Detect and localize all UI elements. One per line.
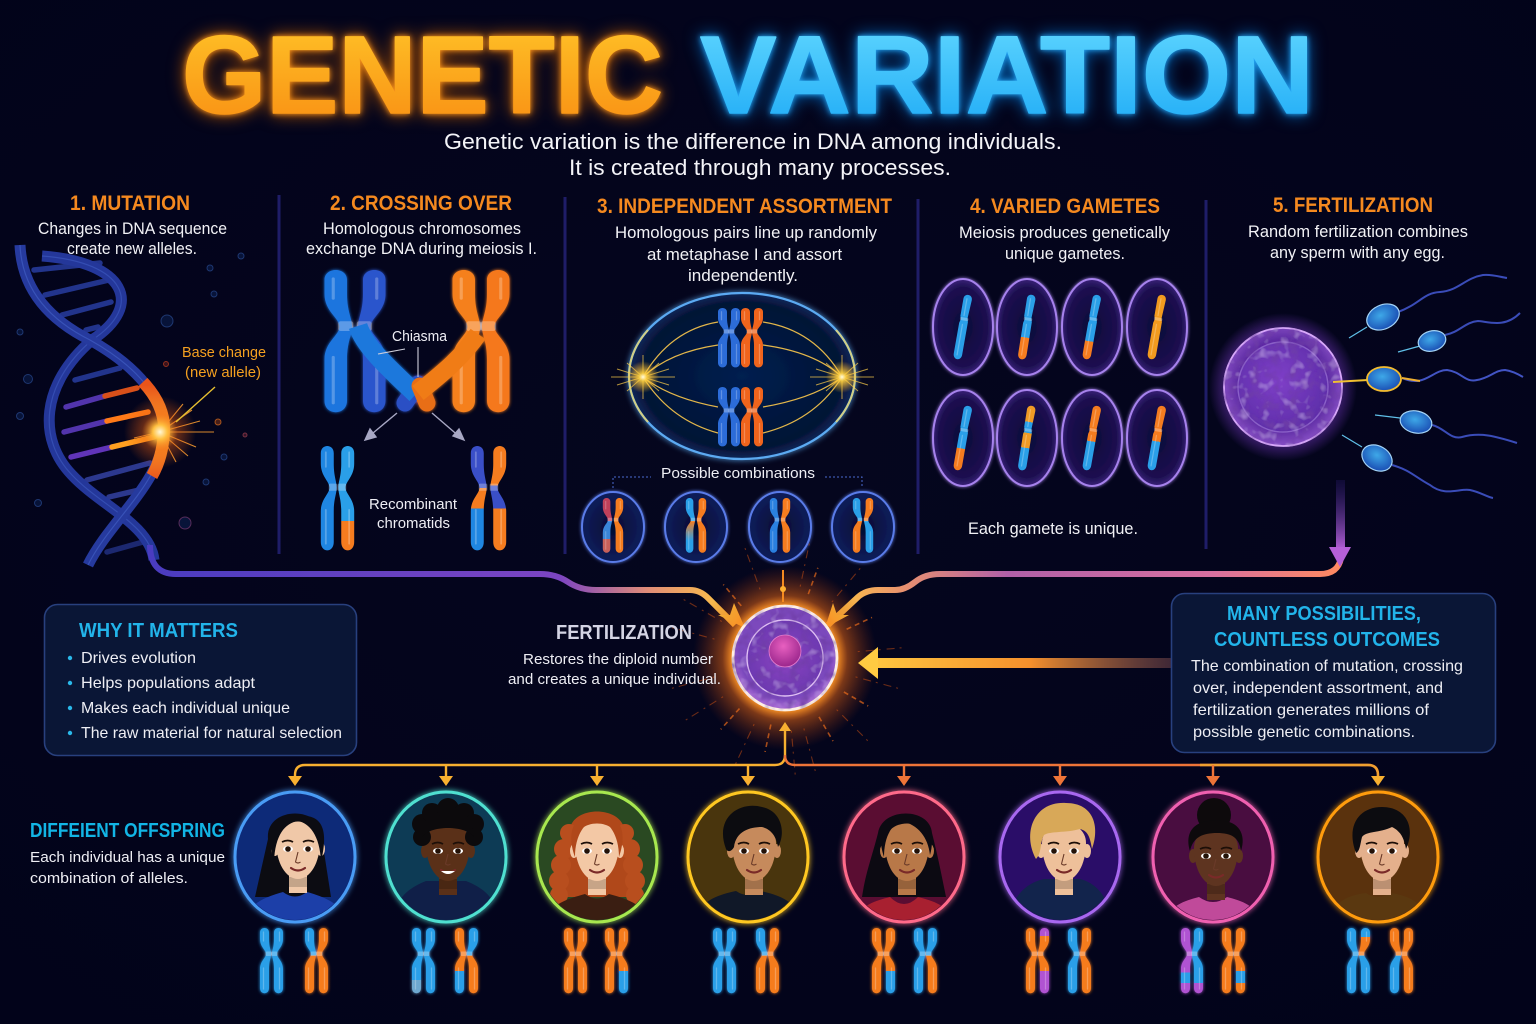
chromosomes: offspring 3 xyxy=(564,928,628,993)
description: fertilization: any sperm with any egg. xyxy=(1270,244,1445,262)
portrait: offspring 6 xyxy=(1000,792,1120,923)
title: VARIATION xyxy=(700,14,1314,137)
portrait: offspring 8 xyxy=(1318,792,1438,923)
recombinant chromosomes xyxy=(321,446,506,550)
title xyxy=(182,14,1314,137)
heading: why it matters: WHY IT MATTERS xyxy=(79,620,238,642)
chromosomes: offspring 2 xyxy=(412,928,478,993)
bullet list xyxy=(68,650,342,742)
panel: why it matters xyxy=(44,604,356,756)
arrow: pathway from fertilization step to zygote xyxy=(825,480,1351,628)
chromosomes: offspring 1 xyxy=(260,928,328,993)
icon: mutation burst xyxy=(124,387,215,468)
description: fertilization: Random fertilization combines xyxy=(1248,223,1468,241)
portrait: offspring 5 xyxy=(844,792,964,923)
heading: fertilization: 5. FERTILIZATION xyxy=(1273,194,1433,217)
panel: mutation xyxy=(16,192,266,565)
panel dividers xyxy=(279,195,1206,554)
label: base change: (new allele) xyxy=(185,365,261,381)
description: mutation: Changes in DNA sequence xyxy=(38,220,227,238)
description: mutation: create new alleles. xyxy=(67,240,197,258)
portrait: offspring 1 xyxy=(235,792,355,923)
portrait: offspring 7 xyxy=(1153,792,1273,923)
description: independent assortment: Homologous pairs line up randomly xyxy=(615,224,878,242)
DNA helix xyxy=(20,245,164,565)
icon: fertilized zygote xyxy=(671,543,903,776)
description: independent assortment: at metaphase I and assort xyxy=(647,246,842,264)
label: chiasma: Chiasma xyxy=(392,329,448,345)
heading: many possibilities: MANY POSSIBILITIES, xyxy=(1227,603,1421,625)
chromosomes: offspring 5 xyxy=(872,928,937,993)
title: GENETIC xyxy=(182,14,663,137)
gamete cells xyxy=(933,279,1187,486)
label: fertilization: FERTILIZATION xyxy=(556,622,692,644)
arrows to recombinant chromatids xyxy=(365,413,464,440)
heading: varied gametes: 4. VARIED GAMETES xyxy=(970,195,1160,218)
portrait: offspring 4 xyxy=(688,792,808,923)
description: fertilization xyxy=(1248,223,1468,262)
label: different offspring xyxy=(30,820,225,887)
panel: fertilization step xyxy=(1209,194,1523,498)
heading: independent assortment: 3. INDEPENDENT ASSORTMENT xyxy=(597,195,892,218)
body text: fertilization generates millions of xyxy=(1193,702,1430,719)
subtitle xyxy=(444,129,1062,180)
label: chiasma xyxy=(378,329,448,377)
bullet list: Drives evolution xyxy=(81,650,196,667)
heading: mutation: 1. MUTATION xyxy=(70,192,190,215)
burst rays xyxy=(671,543,903,776)
description: independent assortment: independently. xyxy=(688,267,798,285)
description: varied gametes xyxy=(959,224,1171,263)
description: crossing over: Homologous chromosomes xyxy=(323,220,521,238)
chromosomes: offspring 4 xyxy=(713,928,779,993)
description: independent assortment xyxy=(615,224,878,285)
decorative bubbles xyxy=(16,253,247,529)
label: different offspring: Each individual has a unique xyxy=(30,849,225,866)
bullet list: Makes each individual unique xyxy=(81,700,290,717)
possible combination cells xyxy=(582,492,894,562)
label: base change: Base change xyxy=(182,345,266,361)
description: varied gametes: unique gametes. xyxy=(1005,245,1125,263)
chromosomes: offspring 6 xyxy=(1026,928,1091,993)
heading: many possibilities: COUNTLESS OUTCOMES xyxy=(1214,629,1440,651)
label: fertilization: and creates a unique individual. xyxy=(508,671,721,688)
subtitle: It is created through many processes. xyxy=(569,155,951,180)
panel: crossing over xyxy=(306,192,537,550)
arrow: zygote to offspring tree xyxy=(288,722,1385,786)
description: crossing over: exchange DNA during meiosis I. xyxy=(306,240,537,258)
chromosomes: offspring 7 xyxy=(1181,928,1245,993)
body text: The combination of mutation, crossing xyxy=(1191,658,1463,675)
bullet list: The raw material for natural selection xyxy=(81,725,342,742)
arrow: pathway from DNA to zygote xyxy=(150,545,745,628)
portrait: offspring 2 xyxy=(386,792,506,923)
label: possible combinations xyxy=(613,465,862,488)
metaphase cell with spindle xyxy=(611,293,874,459)
arrow: possibilities into zygote xyxy=(858,647,1172,679)
description: varied gametes: Meiosis produces genetically xyxy=(959,224,1171,242)
label: fertilization xyxy=(508,622,721,688)
icon: sperm cells xyxy=(1333,275,1523,498)
subtitle: Genetic variation is the difference in DNA among individuals. xyxy=(444,129,1062,154)
panel: independent assortment xyxy=(582,195,894,562)
description: mutation xyxy=(38,220,227,258)
chromosomes crossing at chiasma xyxy=(324,270,510,412)
body text xyxy=(1191,658,1463,741)
body text: over, independent assortment, and xyxy=(1193,680,1443,697)
label: recombinant chromatids xyxy=(369,496,458,532)
heading: crossing over: 2. CROSSING OVER xyxy=(330,192,512,215)
label: fertilization: Restores the diploid number xyxy=(523,651,713,668)
chromosomes: offspring 8 xyxy=(1347,928,1413,993)
chromosomes at metaphase plate xyxy=(718,308,763,446)
label: recombinant chromatids: chromatids xyxy=(377,515,450,532)
label: different offspring: combination of alleles. xyxy=(30,870,188,887)
caption: each gamete is unique: Each gamete is unique. xyxy=(968,520,1138,538)
panel: varied gametes xyxy=(933,195,1187,538)
label: base change xyxy=(182,345,266,381)
label: possible combinations: Possible combinations xyxy=(661,465,815,482)
icon: egg cell xyxy=(1209,313,1357,461)
bullet list: Helps populations adapt xyxy=(81,675,256,692)
label: recombinant chromatids: Recombinant xyxy=(369,496,458,513)
body text: possible genetic combinations. xyxy=(1193,724,1415,741)
panel: many possibilities xyxy=(1172,594,1496,752)
heading: many possibilities xyxy=(1214,603,1440,651)
portrait: offspring 3 xyxy=(537,792,657,923)
description: crossing over xyxy=(306,220,537,258)
label: different offspring: DIFFEIENT OFFSPRING xyxy=(30,820,225,842)
